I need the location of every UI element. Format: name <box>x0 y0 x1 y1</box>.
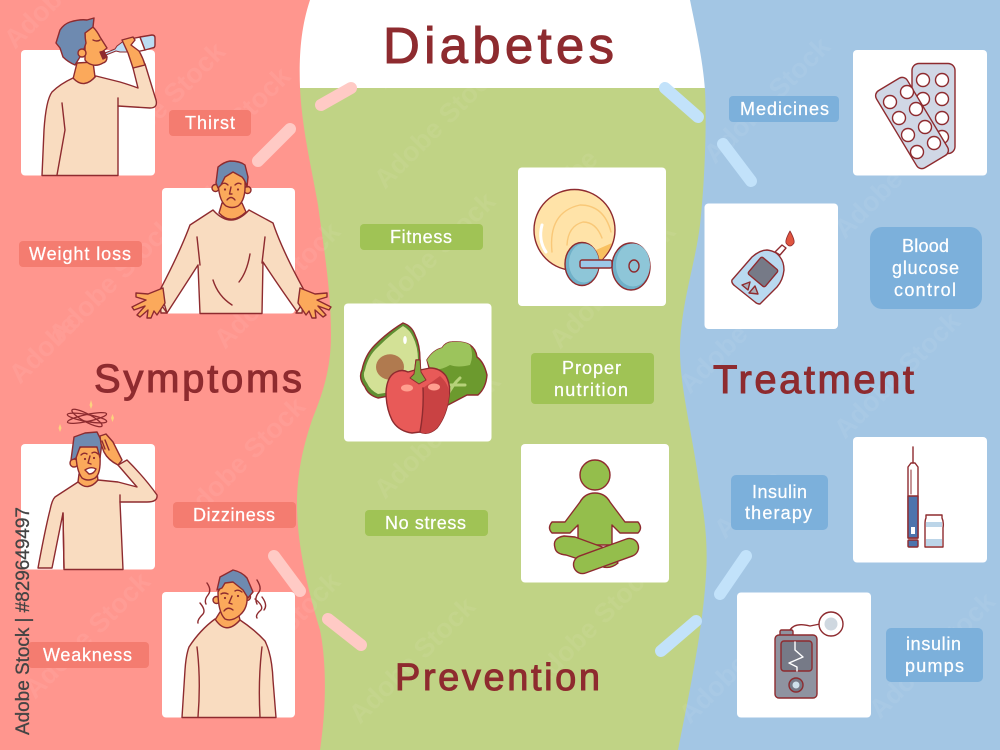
text: Adobe Stock <box>173 391 312 529</box>
label: Proper nutrition: nutrition <box>554 380 628 400</box>
label: Dizziness <box>173 502 296 528</box>
label: insulin pumps: pumps <box>905 656 964 676</box>
text: Stock <box>223 60 297 134</box>
text: Adobe Stock <box>673 261 812 399</box>
text: Adobe Stock <box>18 566 157 704</box>
text: Adobe Stock <box>698 31 837 169</box>
panel: nutrition illustration <box>344 304 492 442</box>
heading: Prevention: Prevention <box>395 657 600 699</box>
text: Adobe Stock <box>523 556 662 694</box>
label: insulin pumps: insulin <box>906 634 961 654</box>
panel: weight loss illustration <box>132 161 331 318</box>
text: Adobe <box>3 309 84 389</box>
icon: thin man shrugging <box>132 161 331 318</box>
icon: man drinking from a bottle <box>42 18 156 176</box>
icon: avocado, pepper and broccoli <box>361 323 487 433</box>
label: Blood glucose control: glucose <box>892 258 959 278</box>
text: Adobe Stock <box>93 36 232 174</box>
label: Weight loss: Weight loss <box>29 244 131 264</box>
text: Adobe Stock <box>43 211 182 349</box>
text: Adobe <box>523 144 604 224</box>
icon: insulin pen and vial <box>908 447 943 547</box>
panel: medicines illustration <box>853 50 987 176</box>
label: Proper nutrition: Proper <box>562 358 621 378</box>
label: Insulin therapy: Insulin <box>752 482 807 502</box>
text: Adobe Stock <box>208 566 347 704</box>
text: Adobe <box>708 464 789 544</box>
label: Blood glucose control: control <box>894 280 956 300</box>
text: Adobe <box>163 164 244 244</box>
text: Adobe <box>543 469 624 549</box>
label: Weakness <box>28 642 149 668</box>
icon: exercise ball and dumbbell <box>534 190 650 290</box>
text: Adobe Stock <box>828 106 967 244</box>
text: Adobe Stock <box>363 186 502 324</box>
icon: weak, exhausted man <box>182 570 276 718</box>
panel: thirst illustration <box>21 18 156 176</box>
text: Adobe Stock <box>368 366 507 504</box>
panel: insulin therapy illustration <box>853 437 987 562</box>
label: Fitness: Fitness <box>390 227 452 247</box>
text: Adobe Stock <box>543 216 682 354</box>
label: Thirst <box>169 110 251 136</box>
label: Dizziness: Dizziness <box>193 505 275 525</box>
label: Insulin therapy: therapy <box>745 503 812 523</box>
panel: blood glucose illustration <box>704 204 838 329</box>
stock image credit: Adobe Stock | #829649497 <box>13 507 34 735</box>
label: insulin pumps <box>886 628 983 682</box>
label: Weight loss <box>19 241 142 267</box>
text: Adobe Stock <box>368 56 507 194</box>
panel: insulin pump illustration <box>737 592 871 718</box>
icon: glucose meter with blood drop <box>732 231 794 304</box>
label: Insulin therapy <box>731 475 828 530</box>
text: Adobe Stock <box>863 586 1000 724</box>
text: Adobe Stock <box>343 591 482 729</box>
heading: Treatment: Treatment <box>713 358 914 402</box>
label: No stress <box>365 510 488 536</box>
label: Medicines: Medicines <box>740 99 829 119</box>
label: Fitness <box>360 224 483 250</box>
panel: fitness illustration <box>518 168 666 306</box>
title: Diabetes: Diabetes <box>383 17 614 74</box>
text: Adobe Stock <box>828 306 967 444</box>
text: Adobe Stock <box>673 591 812 729</box>
label: Weakness: Weakness <box>43 645 132 665</box>
panel: treatment background <box>678 0 1000 750</box>
panel: no stress illustration <box>521 444 669 582</box>
label: No stress: No stress <box>385 513 466 533</box>
label: Thirst: Thirst <box>185 113 235 133</box>
text: Adobe Stock <box>208 216 347 354</box>
label: Proper nutrition <box>531 353 654 404</box>
heading: Symptoms: Symptoms <box>94 357 302 401</box>
icon: person meditating <box>550 460 641 576</box>
label: Medicines <box>729 96 839 122</box>
panel: dizziness illustration <box>21 400 157 570</box>
icon: insulin pump <box>775 612 843 698</box>
panel: weakness illustration <box>162 570 295 718</box>
icon: blister packs <box>873 64 955 171</box>
icon: dizzy man holding his head <box>38 400 157 570</box>
panel: symptoms background <box>0 0 331 750</box>
label: Blood glucose control <box>870 227 982 309</box>
label: Blood glucose control: Blood <box>902 236 949 256</box>
